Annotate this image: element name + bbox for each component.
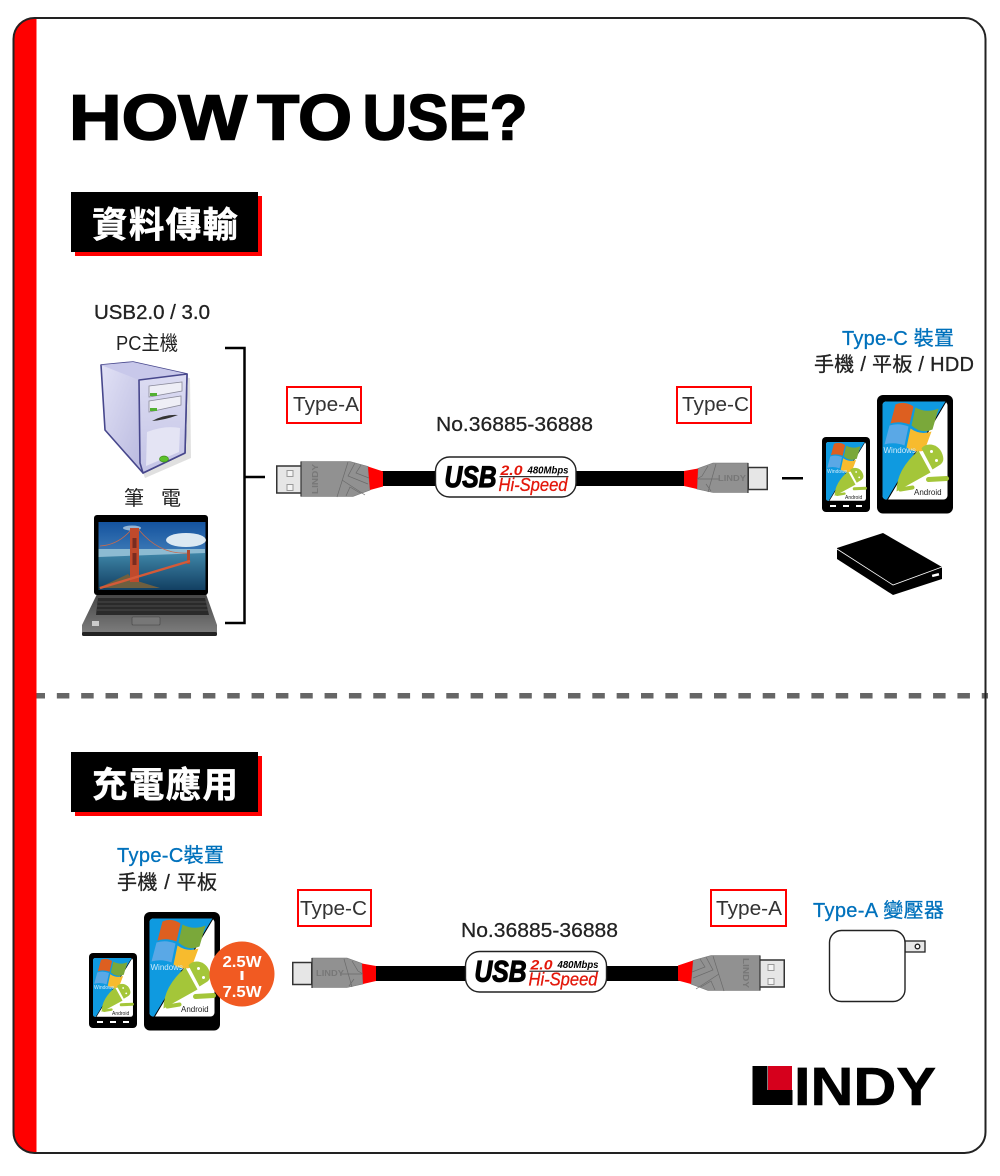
title: TO (257, 82, 352, 154)
icon: phone: Android (112, 1011, 129, 1017)
USB 2.0 Hi-Speed badge (466, 952, 606, 992)
devices label: 手機 / 平板 (117, 871, 217, 894)
adapter label: Type-A 變壓器 (813, 899, 944, 922)
icon: phone: Windows (827, 469, 848, 475)
host label: USB2.0 / 3.0 (94, 302, 210, 324)
icon: phone (89, 953, 137, 1028)
red side strip (14, 18, 36, 1153)
label: Type-C (677, 387, 751, 423)
logo: LINDY: INDY (794, 1057, 936, 1117)
connector stub to devices (782, 477, 803, 480)
connector: Type-A plug: LINDY (741, 958, 751, 988)
label: Type-C (298, 890, 371, 926)
divider: dashed line between sections (32, 693, 988, 698)
icon: desktop tower PC (101, 362, 191, 478)
bracket connecting hosts (225, 348, 265, 623)
icon: external hard drive (837, 533, 942, 595)
connector: Type-C plug: LINDY (718, 473, 746, 483)
heading: charging: 充電應用 (92, 765, 238, 805)
connector: Type-A plug: LINDY (310, 464, 320, 494)
USB 2.0 Hi-Speed badge (436, 457, 576, 497)
USB 2.0 Hi-Speed badge: Hi-Speed (498, 475, 568, 495)
USB 2.0 Hi-Speed badge: 2.0 (529, 956, 553, 972)
USB 2.0 Hi-Speed badge: USB (444, 461, 496, 494)
icon: tablet (144, 912, 220, 1030)
label: Type-A (711, 890, 786, 926)
icon: power adapter (830, 930, 925, 1002)
devices label (117, 844, 224, 894)
badge: power range: 7.5W (222, 984, 262, 1001)
devices label: Type-C裝置 (117, 844, 224, 867)
icon: tablet: Windows (884, 446, 916, 455)
icon: phone (822, 437, 870, 512)
label: Type-C: Type-C (300, 898, 367, 920)
badge: power range: 2.5W (222, 954, 262, 971)
model number: No.36885-36888 (436, 414, 593, 436)
icon: tablet: Android (914, 488, 942, 497)
badge: power range (210, 942, 274, 1006)
cable: USB-A to USB-C (277, 457, 767, 497)
USB 2.0 Hi-Speed badge: 2.0 (499, 462, 523, 478)
devices label: Type-C 裝置 (842, 327, 954, 350)
host label (94, 302, 210, 355)
USB 2.0 Hi-Speed badge: USB (474, 956, 526, 988)
connector: Type-C plug: LINDY (316, 968, 344, 978)
icon: tablet (877, 395, 953, 514)
connector: Type-C plug (684, 463, 767, 493)
panel: charging section (89, 844, 944, 1030)
label: Type-A: Type-A (293, 394, 360, 416)
USB 2.0 Hi-Speed badge: 480Mbps (557, 960, 599, 971)
host label: PC主機 (116, 332, 178, 355)
cable: USB-C to USB-A (293, 952, 784, 992)
title: HOW (69, 82, 248, 154)
heading: data transfer (71, 192, 262, 256)
devices label: 手機 / 平板 / HDD (814, 353, 974, 376)
laptop label: 筆 電 (124, 487, 181, 510)
label: Type-C: Type-C (682, 394, 749, 416)
heading: data transfer: 資料傳輸 (92, 205, 238, 245)
icon: phone: Windows (94, 985, 115, 991)
title: USE? (362, 82, 528, 154)
title (69, 82, 528, 154)
label: Type-A (287, 387, 361, 423)
heading: charging (71, 752, 262, 816)
panel: data transfer section (82, 302, 974, 636)
devices label (814, 327, 974, 376)
icon: tablet: Windows (150, 963, 183, 972)
connector: Type-C plug (293, 958, 376, 988)
icon: laptop with bridge wallpaper (82, 515, 217, 636)
USB 2.0 Hi-Speed badge: 480Mbps (527, 466, 569, 476)
connector: Type-A plug (678, 956, 784, 991)
icon: tablet: Android (181, 1005, 209, 1014)
model number: No.36885-36888 (461, 920, 618, 942)
icon: phone: Android (845, 495, 862, 501)
label: Type-A: Type-A (716, 898, 783, 920)
USB 2.0 Hi-Speed badge: Hi-Speed (528, 970, 598, 990)
connector: Type-A plug (277, 462, 383, 497)
